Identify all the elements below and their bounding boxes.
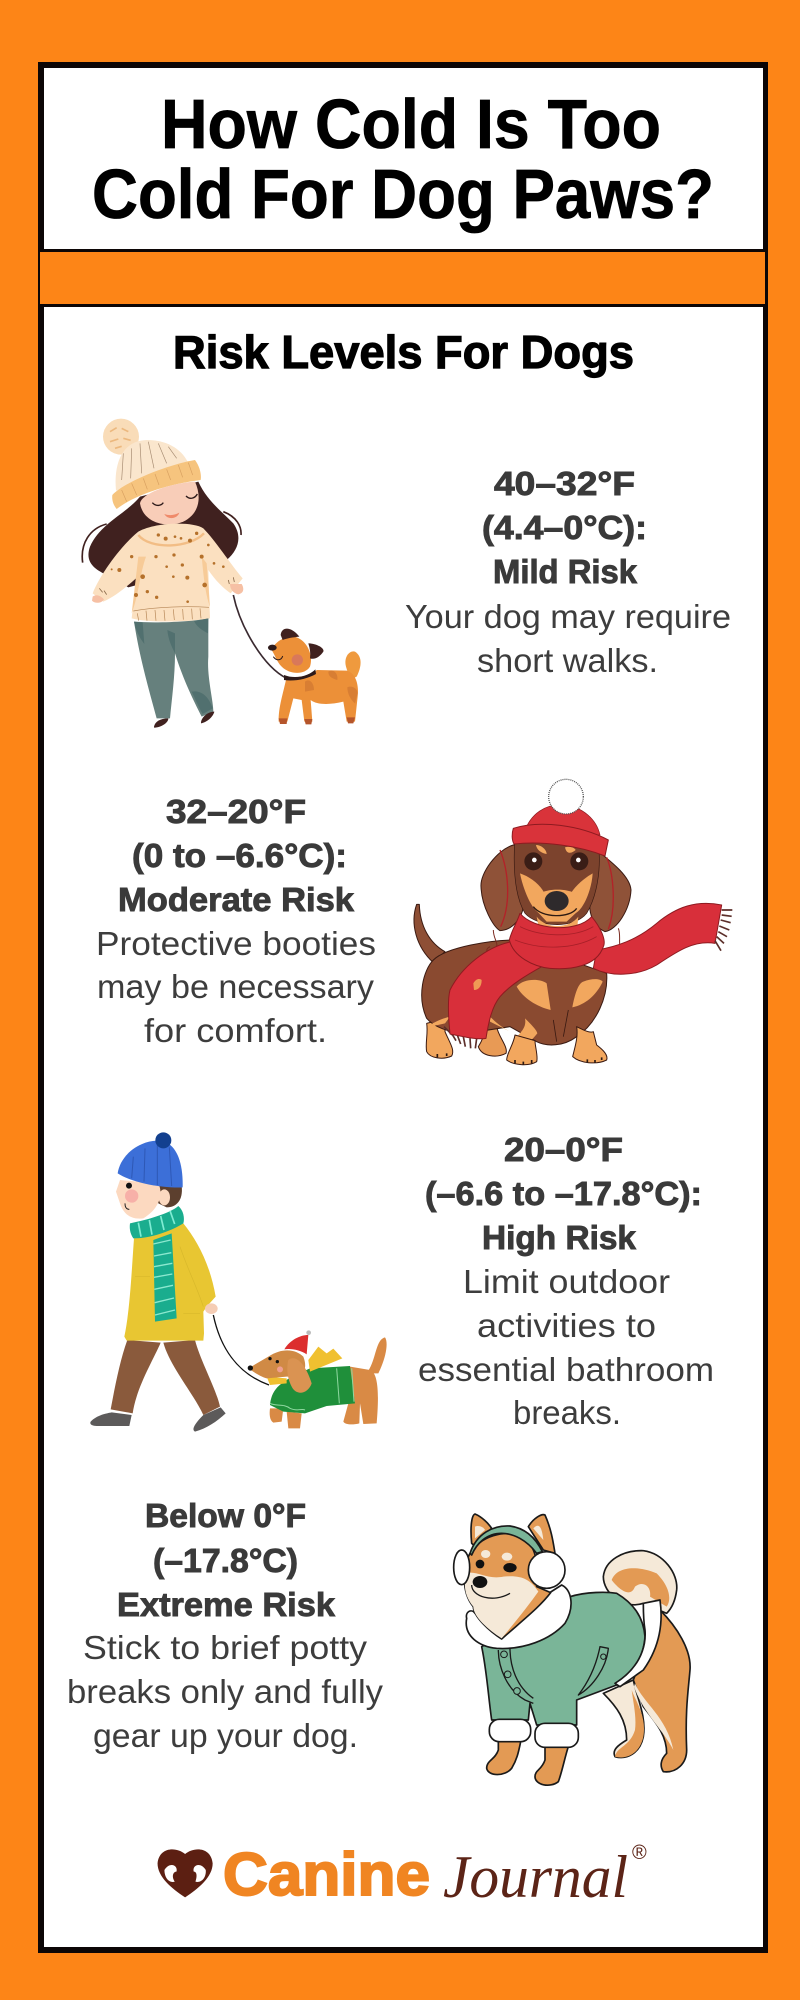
- illustration: girl walking dog: [82, 419, 361, 728]
- text block: high risk: breaks.: [513, 1394, 621, 1431]
- heading: risk levels: Risk Levels For Dogs: [173, 326, 634, 378]
- text block: extreme risk: breaks only and fully: [67, 1673, 384, 1710]
- title: How Cold Is Too: [161, 85, 661, 163]
- text block: high risk: Limit outdoor: [463, 1263, 670, 1300]
- text block: mild risk: (4.4–0°C):: [482, 509, 647, 546]
- text block: extreme risk: Extreme Risk: [117, 1586, 336, 1623]
- text block: extreme risk: gear up your dog.: [93, 1717, 358, 1754]
- logo: canine journal: Journal: [443, 1844, 628, 1910]
- text block: moderate risk: Protective booties: [96, 925, 376, 962]
- icon: heart with dog nose: [158, 1849, 213, 1897]
- title: [92, 85, 714, 233]
- text block: extreme risk: Stick to brief potty: [83, 1629, 368, 1666]
- illustration: dachshund in red hat and scarf: [414, 779, 732, 1065]
- text block: high risk: activities to: [477, 1307, 656, 1344]
- text block: moderate risk: Moderate Risk: [118, 881, 355, 918]
- logo: canine journal: ®: [632, 1842, 647, 1864]
- text block: moderate risk: for comfort.: [144, 1012, 327, 1049]
- logo: canine journal: Canine: [223, 1841, 430, 1908]
- text block: moderate risk: 32–20°F: [166, 793, 306, 830]
- text block: mild risk: Mild Risk: [493, 553, 638, 590]
- text block: extreme risk: (–17.8°C): [153, 1542, 298, 1579]
- text block: moderate risk: [96, 793, 376, 1049]
- text block: mild risk: 40–32°F: [494, 465, 635, 502]
- text block: extreme risk: Below 0°F: [145, 1497, 306, 1534]
- title: Cold For Dog Paws?: [92, 155, 714, 233]
- illustration: shiba inu in green coat and earmuffs: [454, 1514, 690, 1785]
- illustration: boy walking dachshund: [90, 1132, 387, 1432]
- text block: extreme risk: [67, 1497, 384, 1754]
- text block: high risk: essential bathroom: [418, 1351, 714, 1388]
- text block: high risk: 20–0°F: [504, 1131, 623, 1168]
- text block: high risk: [418, 1131, 714, 1431]
- text block: moderate risk: (0 to –6.6°C):: [132, 837, 347, 874]
- text block: high risk: High Risk: [482, 1219, 637, 1256]
- text block: mild risk: short walks.: [477, 642, 658, 679]
- text block: high risk: (–6.6 to –17.8°C):: [425, 1175, 702, 1212]
- text block: moderate risk: may be necessary: [97, 968, 375, 1005]
- logo: canine journal: [158, 1841, 647, 1910]
- text block: mild risk: Your dog may require: [405, 598, 731, 635]
- text block: mild risk: [405, 465, 731, 679]
